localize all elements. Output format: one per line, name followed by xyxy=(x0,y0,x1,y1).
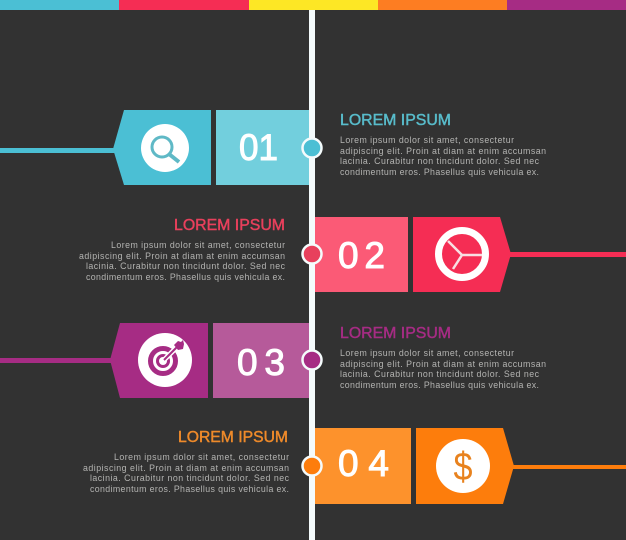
step 2 panel xyxy=(315,217,626,292)
number box 2 xyxy=(315,217,408,292)
body text 2 xyxy=(79,240,286,282)
icon: dollar coin: $ xyxy=(454,445,472,489)
icon tab 4 xyxy=(416,428,514,504)
body text 3: lacinia. Curabitur non tincidunt dolor. Sed nec xyxy=(340,369,540,379)
connector line 4 xyxy=(511,465,626,469)
body text 3: adipiscing elit. Proin at diam at enim accumsan xyxy=(340,359,546,369)
number box 3 xyxy=(213,323,309,398)
body text 2: adipiscing elit. Proin at diam at enim accumsan xyxy=(79,251,285,261)
icon tab 3 xyxy=(110,323,208,398)
body text 4: adipiscing elit. Proin at diam at enim accumsan xyxy=(83,463,289,473)
icon tab 1 xyxy=(113,110,211,185)
number 01: 01 xyxy=(239,127,278,168)
number 02: 02 xyxy=(338,235,385,276)
timeline node 4 xyxy=(302,456,322,476)
connector line 1 xyxy=(0,148,116,153)
icon: pie chart xyxy=(438,230,486,278)
body text 2: lacinia. Curabitur non tincidunt dolor. Sed nec xyxy=(86,261,286,271)
body text 4: Lorem ipsum dolor sit amet, consectetur xyxy=(114,452,289,462)
body text 1: condimentum eros. Phasellus quis vehicula ex. xyxy=(340,167,539,177)
body text 2: Lorem ipsum dolor sit amet, consectetur xyxy=(111,240,285,250)
body text 3: condimentum eros. Phasellus quis vehicula ex. xyxy=(340,380,539,390)
text block 4 xyxy=(83,429,290,494)
body text 1: Lorem ipsum dolor sit amet, consectetur xyxy=(340,135,514,145)
icon: target with arrow xyxy=(138,333,192,387)
text block 1 xyxy=(340,112,546,177)
connector line 3 xyxy=(0,358,113,363)
icon: magnifying glass xyxy=(141,124,189,172)
icon tab 2 xyxy=(413,217,511,292)
heading 1: LOREM IPSUM xyxy=(340,112,451,129)
text block 2 xyxy=(79,217,286,282)
connector line 2 xyxy=(508,252,626,257)
number 03: 03 xyxy=(237,342,285,383)
timeline node 1 xyxy=(302,138,322,158)
body text 4: lacinia. Curabitur non tincidunt dolor. Sed nec xyxy=(90,473,290,483)
heading 3: LOREM IPSUM xyxy=(340,325,451,342)
body text 4: condimentum eros. Phasellus quis vehicula ex. xyxy=(90,484,289,494)
text block 3 xyxy=(340,325,546,390)
vertical timeline xyxy=(309,10,315,540)
heading 2: LOREM IPSUM xyxy=(174,217,285,234)
number box 4 xyxy=(315,428,411,504)
step 1 panel xyxy=(0,110,309,185)
number 04: 04 xyxy=(338,443,389,484)
body text 1 xyxy=(340,135,546,177)
timeline node 2 xyxy=(302,244,322,264)
body text 1: adipiscing elit. Proin at diam at enim accumsan xyxy=(340,146,546,156)
body text 3: Lorem ipsum dolor sit amet, consectetur xyxy=(340,348,514,358)
timeline node 3 xyxy=(302,350,322,370)
heading 4: LOREM IPSUM xyxy=(178,429,288,446)
icon: dollar coin xyxy=(436,439,490,493)
step 4 panel xyxy=(315,428,626,504)
body text 1: lacinia. Curabitur non tincidunt dolor. Sed nec xyxy=(340,156,540,166)
body text 4 xyxy=(83,452,290,494)
body text 3 xyxy=(340,348,546,390)
top colour band xyxy=(0,0,626,10)
number box 1 xyxy=(216,110,309,185)
step 3 panel xyxy=(0,323,309,398)
body text 2: condimentum eros. Phasellus quis vehicula ex. xyxy=(86,272,285,282)
